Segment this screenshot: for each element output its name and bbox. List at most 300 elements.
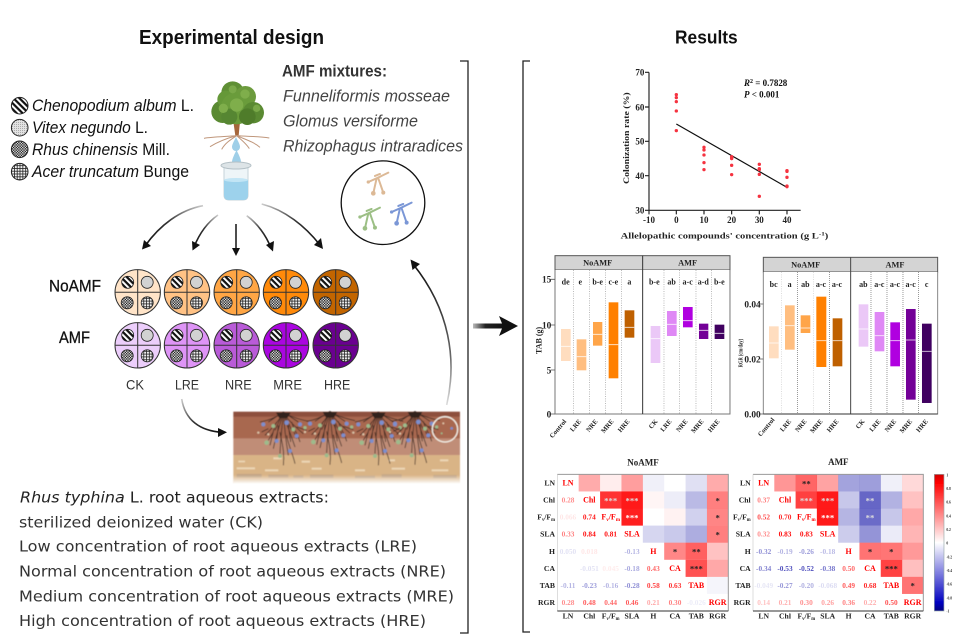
correlation values: -0.068	[818, 581, 837, 590]
strip headers	[763, 257, 938, 272]
significance letters: de	[562, 278, 570, 287]
row labels: Chl	[543, 496, 555, 505]
correlation values: -0.26	[799, 547, 814, 556]
row labels: SLA	[540, 530, 555, 539]
correlation values: 0.36	[842, 598, 855, 607]
diagonal variable names: TAB	[883, 581, 900, 590]
strip headers: AMF	[886, 260, 904, 269]
significance stars: **	[866, 512, 874, 522]
column labels: H	[846, 612, 852, 621]
y axis labels: 30	[635, 206, 645, 216]
arrows: from extract to treatments	[142, 204, 323, 256]
significance letters: b-e	[649, 278, 660, 287]
correlation values: 0.46	[626, 598, 639, 607]
title: Results: Results	[675, 26, 738, 47]
column labels: /F	[803, 612, 812, 621]
row labels: /F	[739, 513, 747, 522]
correlation values: 0.32	[757, 530, 770, 539]
correlation values: 0.81	[604, 530, 617, 539]
labels: treatments	[126, 376, 350, 392]
significance letters: a-c	[832, 280, 843, 289]
correlation values	[754, 496, 898, 607]
column labels: v	[802, 617, 805, 622]
row labels: m	[551, 518, 555, 523]
column labels: v	[606, 617, 609, 622]
correlation values: -0.28	[624, 581, 640, 590]
significance letters: bc	[770, 280, 778, 289]
correlation values: 0.83	[779, 530, 792, 539]
x axis labels: NRE	[585, 418, 600, 434]
x axis labels: 30	[755, 215, 764, 225]
correlation values: 0.22	[864, 598, 877, 607]
line: MRE: Medium concentration of root aqueous extracts (MRE)	[19, 588, 454, 606]
correlation values: -0.53	[777, 564, 793, 573]
colour scale legend: -0.4	[946, 569, 952, 573]
correlation values: 0.70	[779, 513, 792, 522]
callout: circled fungi detail	[432, 417, 458, 442]
correlation values: -0.27	[777, 581, 793, 590]
significance stars	[800, 478, 915, 591]
x axis labels: NRE	[794, 418, 809, 434]
pots: NoAMF row	[115, 270, 358, 315]
correlation values: -0.16	[603, 581, 619, 590]
column labels: RGR	[709, 612, 727, 621]
y axis labels: 60	[635, 102, 645, 112]
statistics annotation: P < 0.001	[744, 89, 780, 99]
x axis labels: Control	[757, 417, 777, 438]
x axis labels: LRE	[569, 418, 584, 433]
correlation values: 0.44	[604, 598, 617, 607]
x axis title: -1	[819, 232, 825, 238]
chart: AMF correlation heatmap	[733, 457, 952, 622]
column labels	[563, 612, 727, 622]
x axis labels	[643, 215, 792, 225]
correlation values: 0.50	[842, 564, 855, 573]
heading: Rhus typhina L. root aqueous extracts:	[20, 489, 329, 507]
diagonal variable names: F	[601, 513, 606, 522]
significance letters: a-d	[698, 278, 709, 287]
significance stars: ***	[885, 564, 898, 574]
correlation values: 0.58	[647, 581, 660, 590]
diagonal variable names: CA	[669, 564, 681, 573]
significance letters: a-c	[816, 280, 827, 289]
x axis labels: LRE	[868, 418, 883, 433]
statistics annotation: 2	[750, 79, 753, 85]
significance stars: ***	[800, 495, 813, 505]
bars	[561, 302, 724, 378]
statistics annotation	[743, 78, 788, 99]
correlation values: -0.049	[754, 581, 773, 590]
y axis title: Colonization rate (%)	[621, 92, 631, 184]
strip headers: AMF	[678, 259, 697, 268]
significance stars: ***	[625, 495, 638, 505]
colour scale legend	[934, 473, 952, 614]
y axis ticks: 0.02	[744, 355, 761, 365]
correlation values: -0.18	[820, 547, 836, 556]
correlation values: -0.026	[687, 598, 706, 607]
diagonal variable names: TAB	[688, 581, 705, 590]
correlation values: 0.045	[602, 564, 619, 573]
correlation values: 0.14	[757, 598, 770, 607]
significance stars: ***	[604, 495, 617, 505]
line: LRE: Low concentration of root aqueous extracts (LRE)	[19, 538, 417, 556]
x axis labels: NRE	[884, 418, 899, 434]
correlation values: 0.84	[583, 530, 596, 539]
column labels: CA	[669, 612, 681, 621]
row labels: CA	[740, 564, 751, 573]
diagonal variable names: Chl	[779, 496, 792, 505]
statistics annotation: = 0.7828	[753, 78, 788, 88]
bracket: closes experimental design	[460, 61, 468, 633]
significance letters: a-c	[874, 280, 885, 289]
correlation values: 0.68	[864, 581, 877, 590]
heatmap title: AMF	[828, 457, 849, 467]
significance stars: *	[868, 547, 872, 557]
correlation values: 0.050	[560, 547, 577, 556]
correlation values: -0.11	[561, 581, 576, 590]
x axis labels: MRE	[690, 418, 706, 435]
strip headers: NoAMF	[583, 259, 612, 268]
diagonal variable names: m	[616, 518, 621, 523]
significance stars: ***	[821, 495, 834, 505]
y axis ticks: 0.00	[744, 410, 761, 420]
correlation values: 0.33	[562, 530, 575, 539]
icon: tree with roots dripping extract into a beaker	[204, 81, 269, 200]
labels: treatments: CK	[126, 376, 145, 392]
correlation values: -0.32	[756, 547, 772, 556]
diagonal variable names: SLA	[624, 530, 640, 539]
arrow: soil back to AMF mixture	[410, 260, 451, 405]
colour scale legend: -0.8	[946, 596, 952, 600]
correlation values: -0.34	[756, 564, 772, 573]
significance letters: a-c	[906, 280, 916, 289]
correlation values: 0.83	[800, 530, 813, 539]
labels: treatments: NRE	[225, 376, 252, 392]
significance letters: b-e	[714, 278, 725, 287]
correlation values: 0.30	[669, 598, 682, 607]
statistics annotation: R	[743, 78, 750, 88]
species: Acer truncatum: Acer truncatum Bunge	[31, 163, 189, 181]
diagonal variable names: LN	[758, 479, 769, 488]
correlation values: 0.63	[669, 581, 682, 590]
diagonal variable names	[758, 479, 922, 607]
species name: Funneliformis mosseae	[283, 88, 450, 106]
y axis labels	[635, 68, 645, 216]
significance stars: *	[910, 581, 915, 591]
significance stars: ***	[625, 512, 638, 522]
column labels: CA	[864, 612, 876, 621]
colour scale legend: 1	[946, 473, 948, 477]
x axis labels	[549, 418, 722, 440]
column labels: RGR	[904, 612, 922, 621]
diagonal variable names: v	[802, 518, 805, 523]
colour scale legend: 0	[946, 542, 948, 546]
significance letters	[770, 280, 929, 289]
correlation values: -0.23	[582, 581, 597, 590]
title: Experimental design: Experimental design	[139, 27, 324, 49]
significance letters: c-e	[608, 278, 619, 287]
x axis title: )	[825, 231, 829, 240]
correlation values: 0.50	[885, 598, 898, 607]
panel: plant species legend	[11, 97, 194, 181]
significance letters: a	[627, 278, 631, 287]
correlation values: 0.30	[800, 598, 813, 607]
correlation values: -0.38	[820, 564, 836, 573]
species: Chenopodium album: Chenopodium album L.	[32, 97, 194, 115]
icon: tree	[204, 81, 269, 149]
correlation values: 0.21	[779, 598, 792, 607]
label: AMF row: AMF	[59, 329, 90, 347]
row labels: RGR	[734, 598, 751, 607]
icon: circle with three AMF fungi	[341, 161, 425, 244]
species: Vitex negundo: Vitex negundo L.	[32, 119, 148, 137]
species name: Glomus versiforme	[283, 113, 418, 131]
column labels: F	[797, 612, 802, 621]
x axis labels: MRE	[899, 418, 915, 435]
correlation values: 0.28	[562, 496, 575, 505]
y axis ticks	[542, 276, 552, 420]
chart: NoAMF correlation heatmap	[537, 458, 728, 622]
significance stars	[604, 495, 720, 574]
significance stars: *	[673, 547, 677, 557]
significance stars: *	[889, 547, 893, 557]
y axis ticks: 15	[542, 276, 552, 286]
correlation values: 0.066	[560, 513, 577, 522]
correlation values: 0.37	[757, 496, 770, 505]
species: Rhus chinensis: Rhus chinensis Mill.	[32, 141, 170, 159]
correlation values: 0.74	[583, 513, 596, 522]
line: HRE: High concentration of root aqueous extracts (HRE)	[19, 612, 426, 630]
row labels: LN	[740, 479, 751, 488]
colour scale legend: 0.2	[946, 528, 951, 532]
correlation values: 0.21	[647, 598, 660, 607]
x axis labels: 20	[727, 215, 737, 225]
x axis labels: LRE	[659, 418, 674, 433]
x axis labels: LRE	[779, 418, 794, 433]
x axis labels: MRE	[600, 418, 616, 435]
heatmap cells	[774, 474, 923, 594]
diagonal variable names: H	[650, 547, 657, 556]
column labels: m	[616, 617, 620, 622]
significance letters: b-e	[592, 278, 603, 287]
x axis labels: 10	[699, 215, 709, 225]
strip headers: NoAMF	[791, 260, 820, 269]
text block: Rhus typhina root aqueous extracts	[19, 489, 454, 630]
chart: colonization rate scatter plot	[621, 68, 829, 240]
significance stars: **	[802, 478, 811, 488]
row labels: RGR	[538, 598, 555, 607]
y axis ticks: 0.04	[744, 300, 761, 310]
x axis labels: HRE	[707, 418, 722, 434]
colour scale legend: 0.8	[946, 487, 951, 491]
x axis labels: -10	[643, 215, 655, 225]
row labels: m	[747, 518, 751, 523]
heading: AMF mixtures: AMF mixtures:	[282, 62, 387, 81]
column labels: H	[650, 612, 656, 621]
correlation values: -0.18	[624, 564, 640, 573]
significance stars: **	[692, 547, 701, 557]
y axis ticks	[744, 300, 761, 420]
heatmap title: NoAMF	[627, 458, 659, 468]
correlation values: 0.48	[583, 598, 596, 607]
row labels: Chl	[739, 496, 751, 505]
correlation values: 0.49	[842, 581, 855, 590]
line: NRE: Normal concentration of root aqueous extracts (NRE)	[19, 563, 446, 581]
diagonal variable names	[562, 479, 727, 607]
chart: TAB floating bars	[534, 256, 730, 440]
correlation values: 0.43	[647, 564, 660, 573]
colour scale legend: -1	[946, 610, 950, 614]
illustration: soil profile with roots and fungi	[233, 411, 460, 484]
pots: AMF row	[115, 323, 358, 368]
significance letters: a-c	[890, 280, 901, 289]
column labels	[758, 612, 922, 622]
y axis title: RGR (cm/day)	[737, 339, 744, 367]
row labels: F	[537, 513, 542, 522]
diagonal variable names: F	[797, 513, 802, 522]
regression line	[676, 124, 787, 187]
column labels: SLA	[625, 612, 640, 621]
diagonal variable names: Chl	[583, 496, 596, 505]
x axis labels: MRE	[809, 418, 825, 435]
significance letters: a	[788, 280, 792, 289]
row labels: SLA	[736, 530, 751, 539]
diagonal variable names: H	[846, 547, 853, 556]
bars	[769, 297, 932, 403]
row labels	[537, 479, 555, 607]
strip headers	[555, 256, 730, 270]
correlation values: 0.26	[821, 598, 834, 607]
colour scale legend: -0.2	[946, 555, 952, 559]
significance letters: a-c	[683, 278, 693, 287]
labels: treatments: MRE	[273, 376, 302, 392]
treatment grid: pot circles	[115, 270, 358, 368]
correlation values: -0.051	[580, 564, 599, 573]
y axis labels: 70	[635, 68, 645, 78]
y axis ticks: 10	[542, 321, 552, 331]
diagonal variable names: LN	[562, 479, 574, 488]
x axis labels: NRE	[675, 418, 690, 434]
correlation values: 0.52	[757, 513, 770, 522]
arrow: treatments to soil	[182, 399, 227, 437]
column labels: TAB	[884, 612, 899, 621]
label: NoAMF row: NoAMF	[49, 278, 101, 296]
column labels: LN	[563, 612, 574, 621]
line: CK: sterilized deionized water (CK)	[19, 513, 263, 531]
correlation values	[560, 496, 706, 607]
diagonal variable names: SLA	[820, 530, 836, 539]
bracket: opens results	[523, 61, 530, 632]
x axis labels: 40	[782, 215, 792, 225]
arrow: design leads to results	[473, 316, 518, 336]
row labels: v	[738, 518, 741, 523]
row labels: LN	[544, 479, 555, 488]
y axis ticks: 5	[547, 366, 552, 376]
icon: beaker	[221, 162, 251, 200]
labels: treatments: HRE	[324, 376, 350, 392]
column labels: F	[602, 612, 606, 621]
panel: AMF mixtures text	[282, 62, 463, 156]
diagonal variable names: RGR	[709, 598, 727, 607]
chart: RGR floating bars	[737, 257, 938, 438]
correlation values: -0.52	[799, 564, 814, 573]
column labels: LN	[758, 612, 769, 621]
column labels: m	[811, 617, 815, 622]
y axis title: TAB (g)	[534, 327, 543, 354]
row labels: TAB	[735, 581, 751, 590]
y axis labels: 50	[635, 137, 645, 147]
diagonal variable names: v	[606, 518, 609, 523]
significance stars: *	[715, 512, 720, 522]
correlation values: 0.28	[562, 598, 575, 607]
diagonal variable names: /F	[803, 513, 812, 522]
colour scale legend: -0.6	[946, 583, 952, 587]
x axis labels: CK	[648, 418, 660, 431]
significance stars: *	[715, 529, 720, 539]
x axis labels: CK	[855, 418, 867, 431]
significance letters	[562, 278, 725, 287]
colour scale legend: 0.4	[946, 514, 951, 518]
x axis labels	[757, 417, 930, 438]
y axis labels: 40	[635, 171, 645, 181]
column labels: /F	[608, 612, 616, 621]
x axis title: Allelopathic compounds' concentration (g L	[621, 231, 770, 240]
significance letters: e	[579, 278, 583, 287]
row labels: CA	[544, 564, 555, 573]
significance stars: **	[866, 495, 874, 505]
row labels: /F	[543, 513, 551, 522]
significance stars: ***	[690, 564, 703, 574]
column labels: TAB	[689, 612, 704, 621]
diagonal variable names: m	[811, 518, 816, 523]
significance letters: ab	[667, 278, 676, 287]
species name: Rhizophagus intraradices	[283, 138, 463, 156]
significance stars: ***	[821, 512, 834, 522]
row labels: H	[745, 547, 751, 556]
y axis ticks: 0	[547, 410, 552, 420]
row labels: H	[549, 547, 555, 556]
row labels: v	[542, 518, 545, 523]
diagonal variable names: /F	[608, 513, 616, 522]
x axis labels: 0	[674, 215, 679, 225]
x axis labels: Control	[549, 418, 568, 440]
heatmap cells	[579, 474, 728, 594]
colour scale legend: 0.6	[946, 501, 951, 505]
diagonal variable names: RGR	[904, 598, 922, 607]
x axis labels: HRE	[617, 418, 632, 434]
column labels: Chl	[779, 612, 791, 621]
column labels: SLA	[820, 612, 836, 621]
correlation values: -0.20	[799, 581, 814, 590]
correlation values: -0.13	[624, 547, 640, 556]
significance letters: c	[925, 280, 929, 289]
row labels: TAB	[540, 581, 555, 590]
x axis labels: HRE	[915, 418, 930, 434]
significance letters: ab	[859, 280, 868, 289]
row labels: F	[733, 513, 738, 522]
column labels: Chl	[583, 612, 595, 621]
diagonal variable names: CA	[864, 564, 876, 573]
correlation values: 0.018	[581, 547, 598, 556]
significance letters: ab	[801, 280, 810, 289]
data points	[675, 93, 789, 198]
labels: treatments: LRE	[175, 376, 199, 392]
correlation values: -0.19	[777, 547, 793, 556]
row labels	[733, 479, 751, 607]
significance stars: *	[715, 495, 720, 505]
x axis labels: HRE	[826, 418, 841, 434]
icon: drops	[232, 137, 241, 166]
